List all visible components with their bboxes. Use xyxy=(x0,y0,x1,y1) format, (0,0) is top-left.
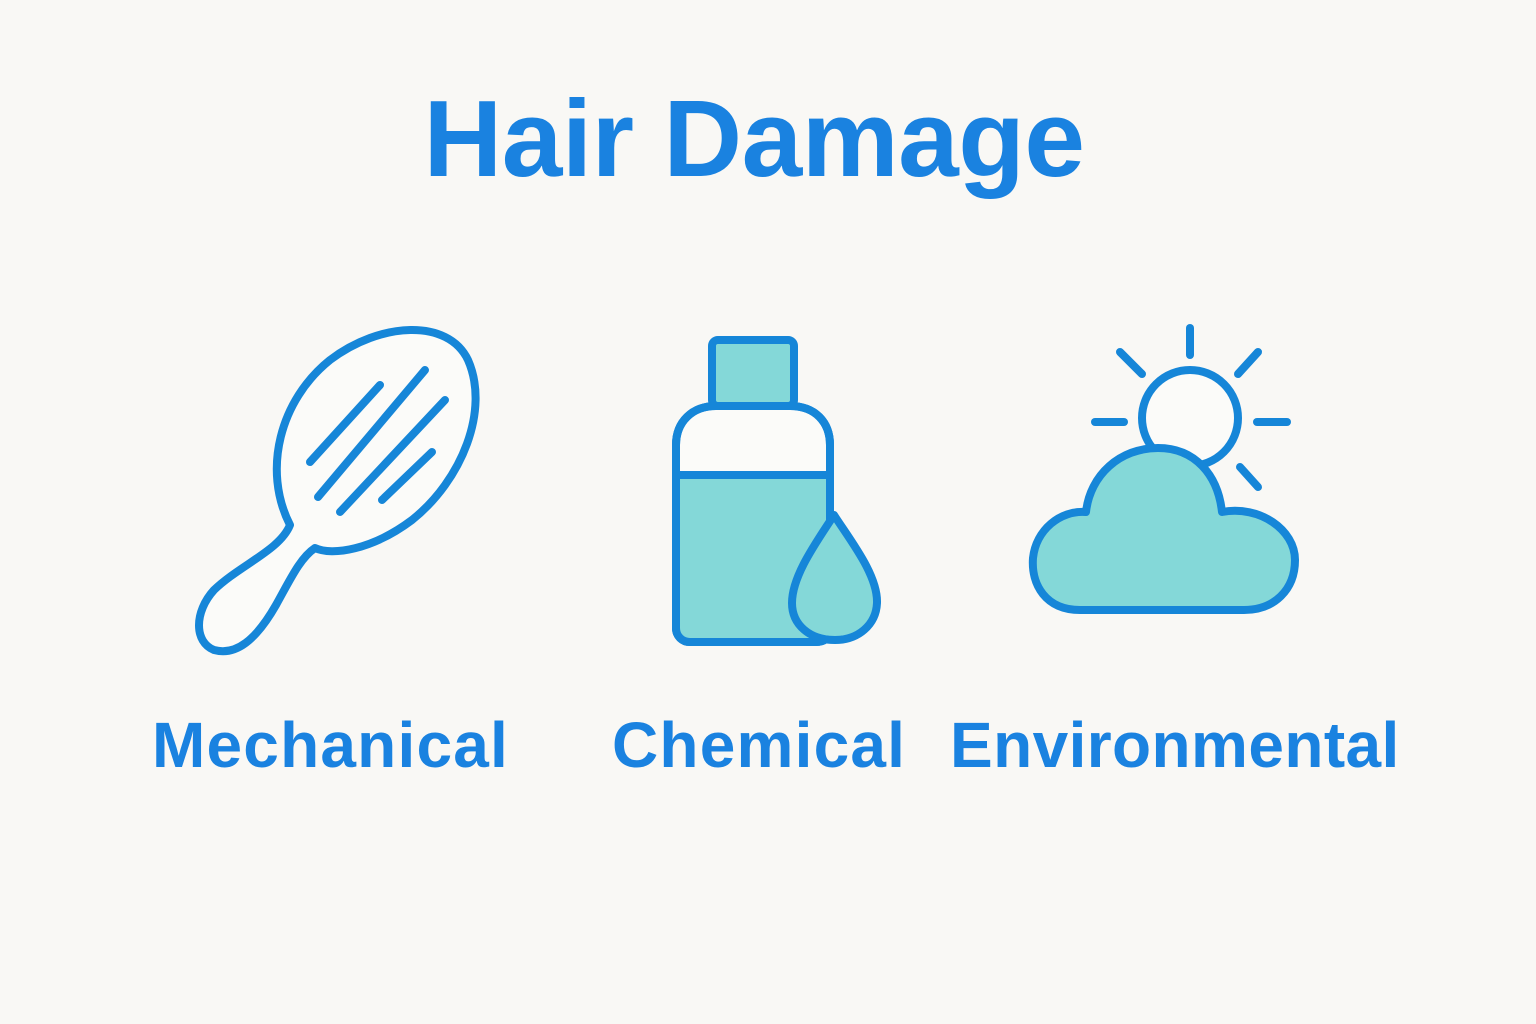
title: Hair Damage xyxy=(424,78,1084,200)
icon: bottle with drop xyxy=(676,340,877,642)
label: environmental: Environmental xyxy=(950,709,1400,781)
label: mechanical: Mechanical xyxy=(152,709,509,781)
icon: hair brush xyxy=(199,330,476,651)
label: chemical: Chemical xyxy=(612,709,906,781)
icon: sun and cloud xyxy=(1033,328,1295,610)
